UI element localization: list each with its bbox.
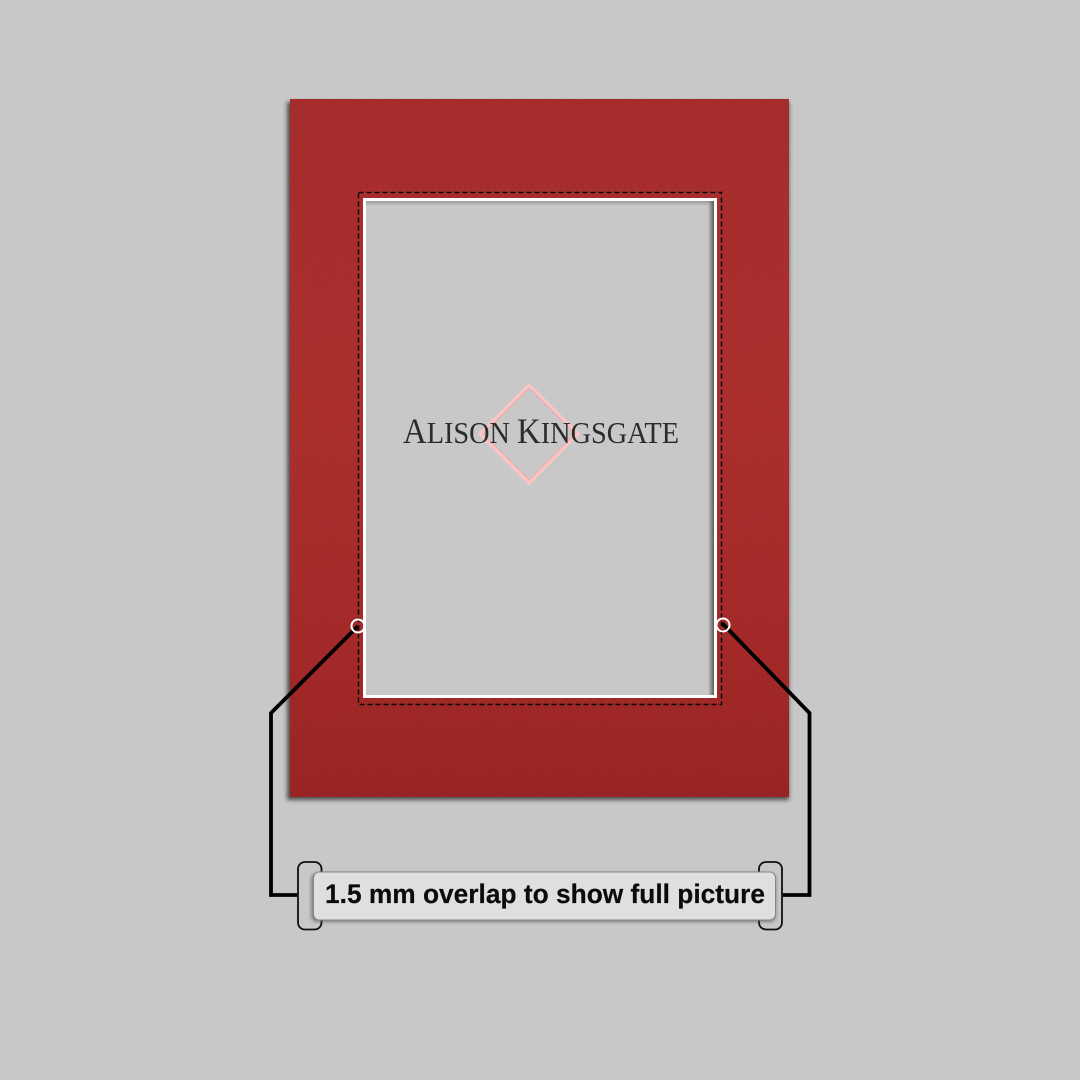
opening top shadow: [366, 201, 714, 206]
label text: 1.5 mm overlap to show full picture: [325, 879, 765, 909]
dashed overlap outline: [358, 192, 722, 704]
panel: mount opening: [363, 198, 717, 698]
left marker circle: [352, 620, 364, 632]
opening right shadow: [708, 201, 714, 695]
left label bracket: [298, 862, 322, 930]
mount paper texture: [290, 99, 789, 797]
right callout leader line: [722, 623, 810, 895]
callout label: overlap note: [298, 862, 782, 930]
label box: [314, 872, 776, 920]
logo wordmark: ALISON KINGSGATE: [403, 411, 679, 451]
mount shadow: [287, 102, 789, 800]
opening interior: [366, 201, 714, 695]
logo diamond: [480, 385, 578, 483]
opening white bevel: [363, 198, 717, 698]
panel: red picture mount: [287, 99, 789, 800]
right label bracket: [759, 862, 782, 930]
right marker circle: [716, 618, 730, 632]
mount board: [290, 99, 789, 797]
logo: Alison Kingsgate: [403, 385, 679, 483]
label shadow: [311, 873, 776, 922]
left callout leader line: [271, 626, 358, 895]
